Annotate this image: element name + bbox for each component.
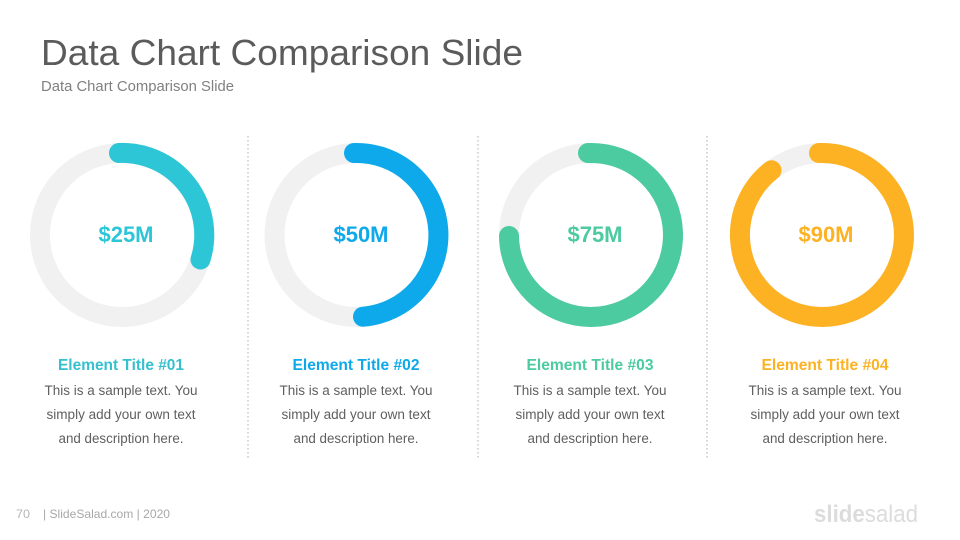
description: and description here. xyxy=(528,431,652,446)
panel: element 1 xyxy=(40,153,204,446)
description: This is a sample text. You xyxy=(748,383,902,398)
description: simply add your own text xyxy=(282,407,431,422)
value: $50M xyxy=(334,222,388,247)
description: and description here. xyxy=(294,431,418,446)
value: $25M xyxy=(98,222,154,247)
description: and description here. xyxy=(762,431,888,446)
page number: 70 xyxy=(16,509,30,521)
description: This is a sample text. You xyxy=(44,383,198,398)
footer text: | SlideSalad.com | 2020 xyxy=(43,507,170,521)
heading: Element Title #01 xyxy=(58,357,184,374)
description: simply add your own text xyxy=(46,407,196,422)
panel: element 3 xyxy=(509,153,673,446)
description: simply add your own text xyxy=(516,407,665,422)
subtitle: Data Chart Comparison Slide xyxy=(41,78,234,95)
description xyxy=(514,383,666,446)
description xyxy=(280,383,432,446)
description: This is a sample text. You xyxy=(514,383,666,398)
title: Data Chart Comparison Slide xyxy=(41,32,523,73)
description: simply add your own text xyxy=(750,407,900,422)
heading: Element Title #02 xyxy=(292,357,420,374)
donut chart 90M xyxy=(740,153,904,317)
panel: element 4 xyxy=(740,153,904,446)
description xyxy=(748,383,902,446)
heading: Element Title #04 xyxy=(762,357,889,374)
donut chart 25M xyxy=(40,153,204,317)
logo: slidesalad: slidesalad xyxy=(814,501,918,528)
description xyxy=(44,383,198,446)
donut chart 50M xyxy=(274,153,438,317)
donut chart 75M xyxy=(509,153,673,317)
description: This is a sample text. You xyxy=(280,383,432,398)
value: $90M xyxy=(798,222,854,247)
heading: Element Title #03 xyxy=(526,357,654,374)
panel: element 2 xyxy=(274,153,438,446)
value: $75M xyxy=(568,222,622,247)
description: and description here. xyxy=(58,431,184,446)
